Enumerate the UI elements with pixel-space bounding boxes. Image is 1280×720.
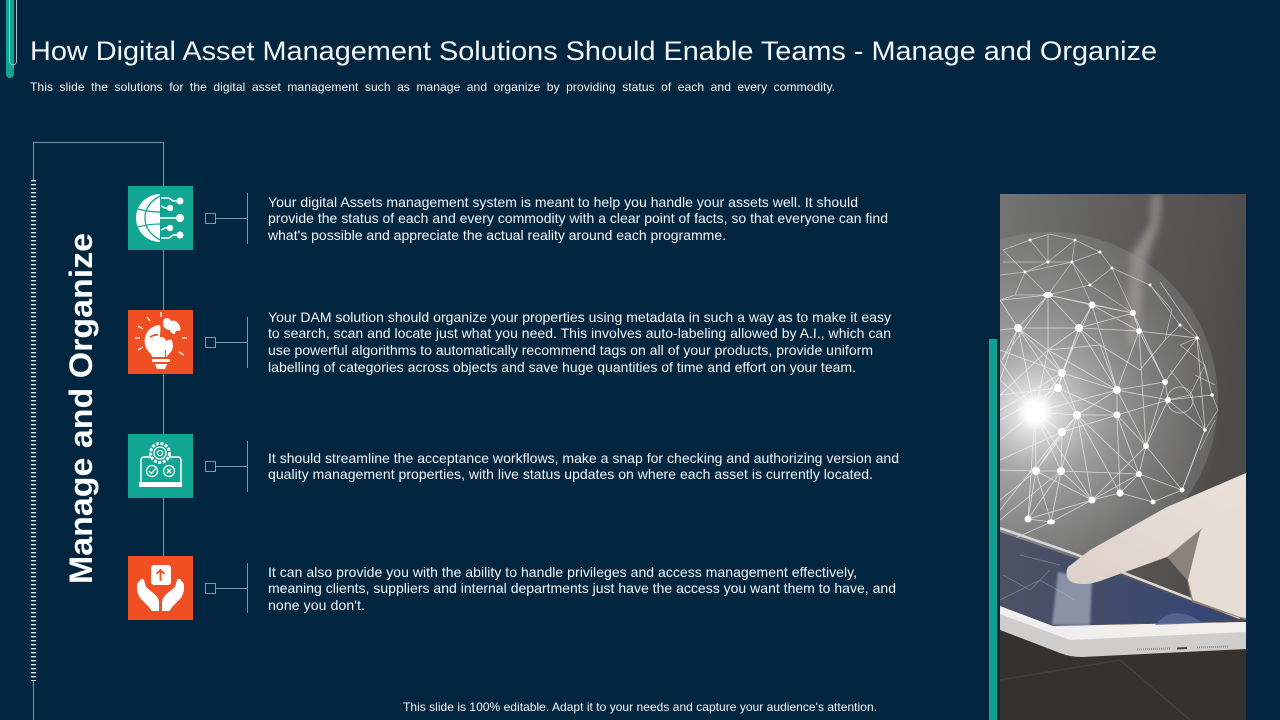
icon: puzzle light bulb bbox=[128, 310, 193, 374]
photo: hand touching tablet with network globe bbox=[1000, 194, 1246, 720]
tablet base surface bbox=[1000, 640, 1246, 720]
text block: quality management properties, with live status updates on where each asset is currently located. bbox=[268, 466, 873, 482]
connector bbox=[206, 441, 248, 492]
tablet body bbox=[1000, 606, 1246, 657]
title: How Digital Asset Management Solutions Should Enable Teams - Manage and Organize bbox=[30, 36, 1157, 66]
footer note: This slide is 100% editable. Adapt it to your needs and capture your audience's attention. bbox=[403, 700, 877, 714]
icon: digital globe bbox=[128, 186, 193, 250]
text block: Your DAM solution should organize your properties using metadata in such a way as to make it easy bbox=[268, 309, 891, 325]
network globe bbox=[1000, 232, 1218, 559]
connector bbox=[206, 563, 248, 613]
hand bbox=[1167, 500, 1246, 620]
text block: what's possible and appreciate the actual reality around each programme. bbox=[267, 227, 726, 243]
tablet speaker and port bbox=[1137, 646, 1228, 650]
text block: It can also provide you with the ability to handle privileges and access management effectively, bbox=[268, 564, 857, 580]
tablet screen bbox=[1000, 532, 1237, 626]
vertical heading: Manage and Organize bbox=[63, 233, 99, 584]
text block: provide the status of each and every commodity with a clear point of facts, so that everyone can find bbox=[268, 210, 888, 226]
connector bbox=[206, 317, 248, 368]
item 2: metadata organisation bbox=[128, 309, 891, 375]
ruler ticks bbox=[31, 180, 36, 681]
top-left accent bar bbox=[6, 0, 17, 78]
connector bbox=[206, 193, 248, 244]
text block bbox=[268, 309, 891, 375]
text block bbox=[268, 450, 899, 482]
text block: use powerful algorithms to automatically recommend tags on all of your products, provide uniform bbox=[268, 342, 873, 358]
item 1: digital network bbox=[128, 186, 888, 250]
text block: to search, scan and locate just what you need. This involves auto-labeling allowed by A.I., which can bbox=[268, 325, 891, 341]
tablet top edge bbox=[1000, 528, 1240, 618]
icon: gear and laptop bbox=[128, 434, 193, 498]
text block: Your digital Assets management system is meant to help you handle your assets well. It should bbox=[268, 194, 858, 210]
icon: hands holding box bbox=[128, 556, 193, 620]
text block: It should streamline the acceptance workflows, make a snap for checking and authorizing version and bbox=[268, 450, 899, 466]
text block: labelling of categories across objects and save huge quantities of time and effort on your team. bbox=[268, 359, 856, 375]
light streak bbox=[1127, 194, 1161, 344]
text block bbox=[268, 564, 896, 613]
teal side bar bbox=[989, 339, 997, 720]
item 3: approval workflows bbox=[128, 434, 899, 498]
text block: meaning clients, suppliers and internal departments just have the access you want them to have, and bbox=[268, 580, 896, 596]
frame connector line bbox=[34, 142, 164, 720]
text block bbox=[267, 194, 888, 243]
text block: none you don't. bbox=[268, 597, 365, 613]
item 4: access management bbox=[128, 556, 896, 620]
subtitle: This slide the solutions for the digital asset management such as manage and organize by providing status of each and every commodity. bbox=[30, 80, 835, 94]
